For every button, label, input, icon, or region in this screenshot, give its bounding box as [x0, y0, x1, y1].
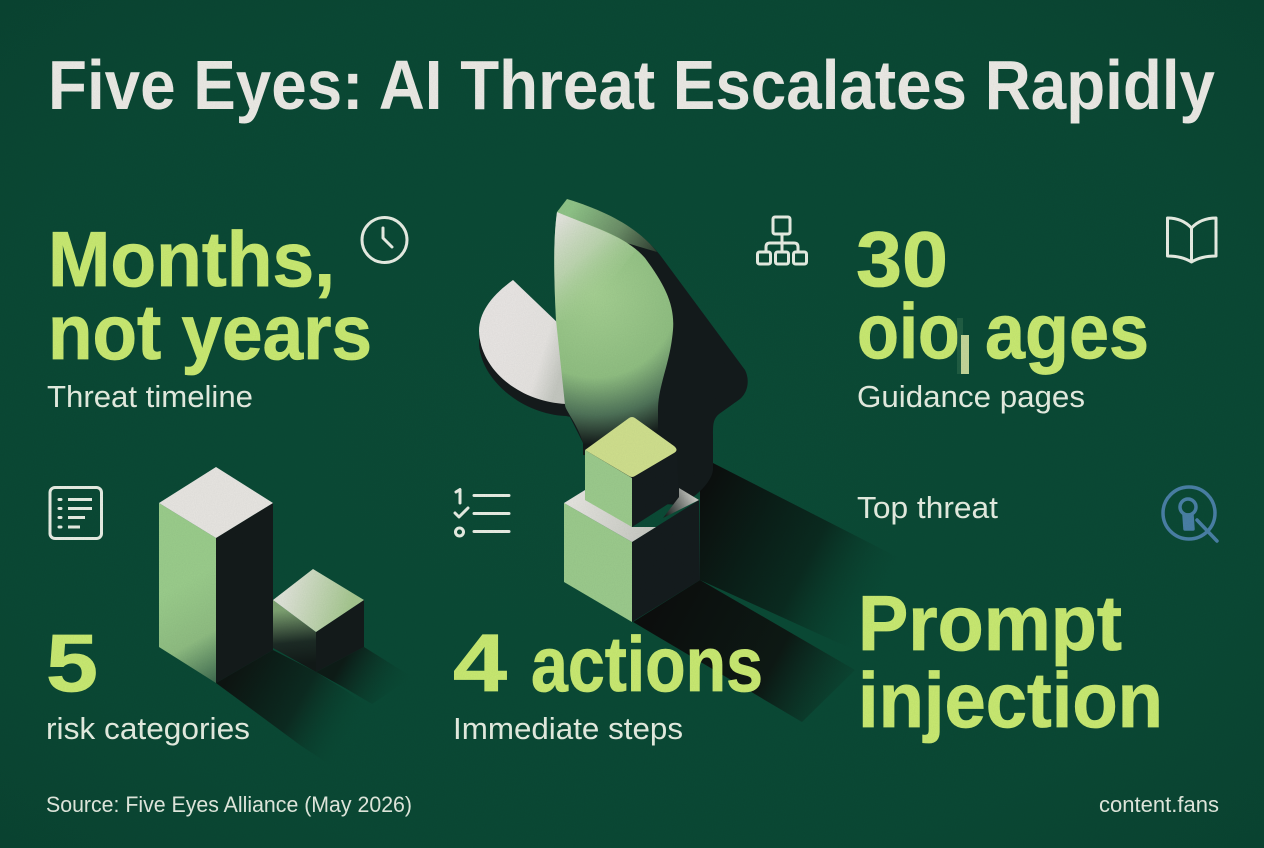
- icon: open book: [1168, 218, 1216, 262]
- glitch mark: [957, 318, 969, 374]
- disc wedge: [479, 280, 585, 420]
- illustration: central head and stacked cubes: [479, 199, 915, 722]
- shadow of the blocks: [216, 647, 412, 775]
- lower cube: [564, 488, 700, 622]
- green leaf face: [554, 199, 673, 460]
- icon: checklist: [455, 490, 509, 536]
- stat: threat timeline: not years: [48, 288, 372, 376]
- tall block: [159, 467, 273, 683]
- credit: content.fans: [1099, 792, 1219, 817]
- stat: guidance pages: Guidance pages: [857, 379, 1085, 414]
- stat: risk categories: risk categories: [46, 711, 250, 746]
- stat: top threat: Prompt: [858, 579, 1122, 667]
- stat: threat timeline: [47, 215, 372, 414]
- stat: immediate steps: [453, 618, 763, 746]
- icon: hierarchy: [758, 217, 806, 264]
- source: Source: Five Eyes Alliance (May 2026): [46, 792, 412, 817]
- stat: guidance pages: ages: [985, 287, 1149, 375]
- cube shadows: [633, 463, 915, 722]
- stat: top threat: Top threat: [857, 490, 998, 525]
- icon: document list: [50, 488, 102, 538]
- icon: clock: [362, 218, 407, 262]
- stat: immediate steps: actions: [531, 620, 763, 708]
- stat: immediate steps: 4: [453, 618, 507, 709]
- stat: threat timeline: Threat timeline: [47, 379, 253, 414]
- stat: threat timeline: Months,: [48, 215, 335, 303]
- small block: [273, 569, 364, 672]
- dark head silhouette: [565, 199, 748, 505]
- stat: risk categories: 5: [46, 618, 98, 709]
- illustration: isometric blocks left: [159, 467, 412, 775]
- stat: guidance pages: oio: [857, 287, 960, 375]
- stat: top threat: [857, 490, 1163, 744]
- stat: guidance pages: [856, 215, 1149, 414]
- stat: top threat: injection: [858, 656, 1163, 744]
- icon: keyhole in circle: [1163, 487, 1217, 541]
- stat: immediate steps: Immediate steps: [453, 711, 683, 746]
- upper cube: [585, 417, 679, 527]
- stat: risk categories: [46, 618, 250, 746]
- stat: guidance pages: 30: [856, 215, 948, 303]
